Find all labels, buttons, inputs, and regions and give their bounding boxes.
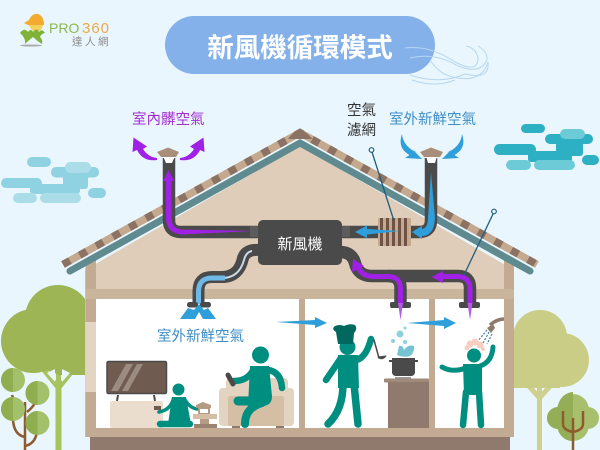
man on sofa bbox=[228, 346, 282, 424]
label: fresh outdoor air room: 室外新鮮空氣 bbox=[157, 328, 244, 345]
title pill: 新風機循環模式 bbox=[207, 33, 393, 63]
shower bbox=[478, 319, 504, 345]
title pill bbox=[165, 16, 435, 74]
label: filter: 空氣 bbox=[347, 102, 376, 119]
steam bbox=[391, 326, 414, 357]
cloud: left bbox=[1, 157, 106, 203]
wind lines bbox=[405, 46, 488, 84]
chef bbox=[326, 324, 386, 424]
rooms bbox=[96, 299, 504, 428]
tree: left large bbox=[1, 285, 94, 450]
exhaust duct bbox=[132, 138, 260, 234]
sofa bbox=[219, 378, 294, 428]
tree: right pale bbox=[510, 310, 589, 450]
child bbox=[154, 384, 197, 424]
logo: 達人網 bbox=[72, 35, 111, 48]
pot and counter bbox=[384, 358, 429, 428]
label: filter bbox=[347, 102, 376, 139]
TV bbox=[107, 362, 166, 428]
label: filter: 濾網 bbox=[347, 122, 376, 139]
machine bbox=[250, 220, 350, 265]
arrow: kitchen to bath bbox=[407, 317, 456, 329]
label: dirty indoor air: 室內髒空氣 bbox=[132, 111, 204, 128]
house wall and gable bbox=[85, 146, 514, 437]
exhaust branch duct bbox=[340, 252, 480, 320]
tree: right small bbox=[547, 392, 599, 450]
foam bbox=[464, 338, 485, 351]
logo: 360 bbox=[82, 20, 110, 37]
supply duct bbox=[180, 250, 259, 319]
bathing person bbox=[442, 347, 493, 425]
logo bbox=[20, 14, 111, 48]
roof bbox=[63, 130, 537, 271]
arrow: room one to kitchen bbox=[276, 317, 327, 328]
intake duct bbox=[340, 134, 463, 239]
tree: left small bbox=[1, 368, 50, 450]
air filter bbox=[355, 218, 411, 246]
logo: PRO bbox=[49, 20, 79, 36]
cloud: right bbox=[494, 124, 599, 170]
leader lines bbox=[369, 148, 496, 275]
foundation bbox=[90, 437, 510, 450]
machine: 新風機 bbox=[277, 236, 323, 253]
toy blocks bbox=[193, 402, 217, 428]
label: fresh outdoor air top: 室外新鮮空氣 bbox=[389, 111, 476, 128]
